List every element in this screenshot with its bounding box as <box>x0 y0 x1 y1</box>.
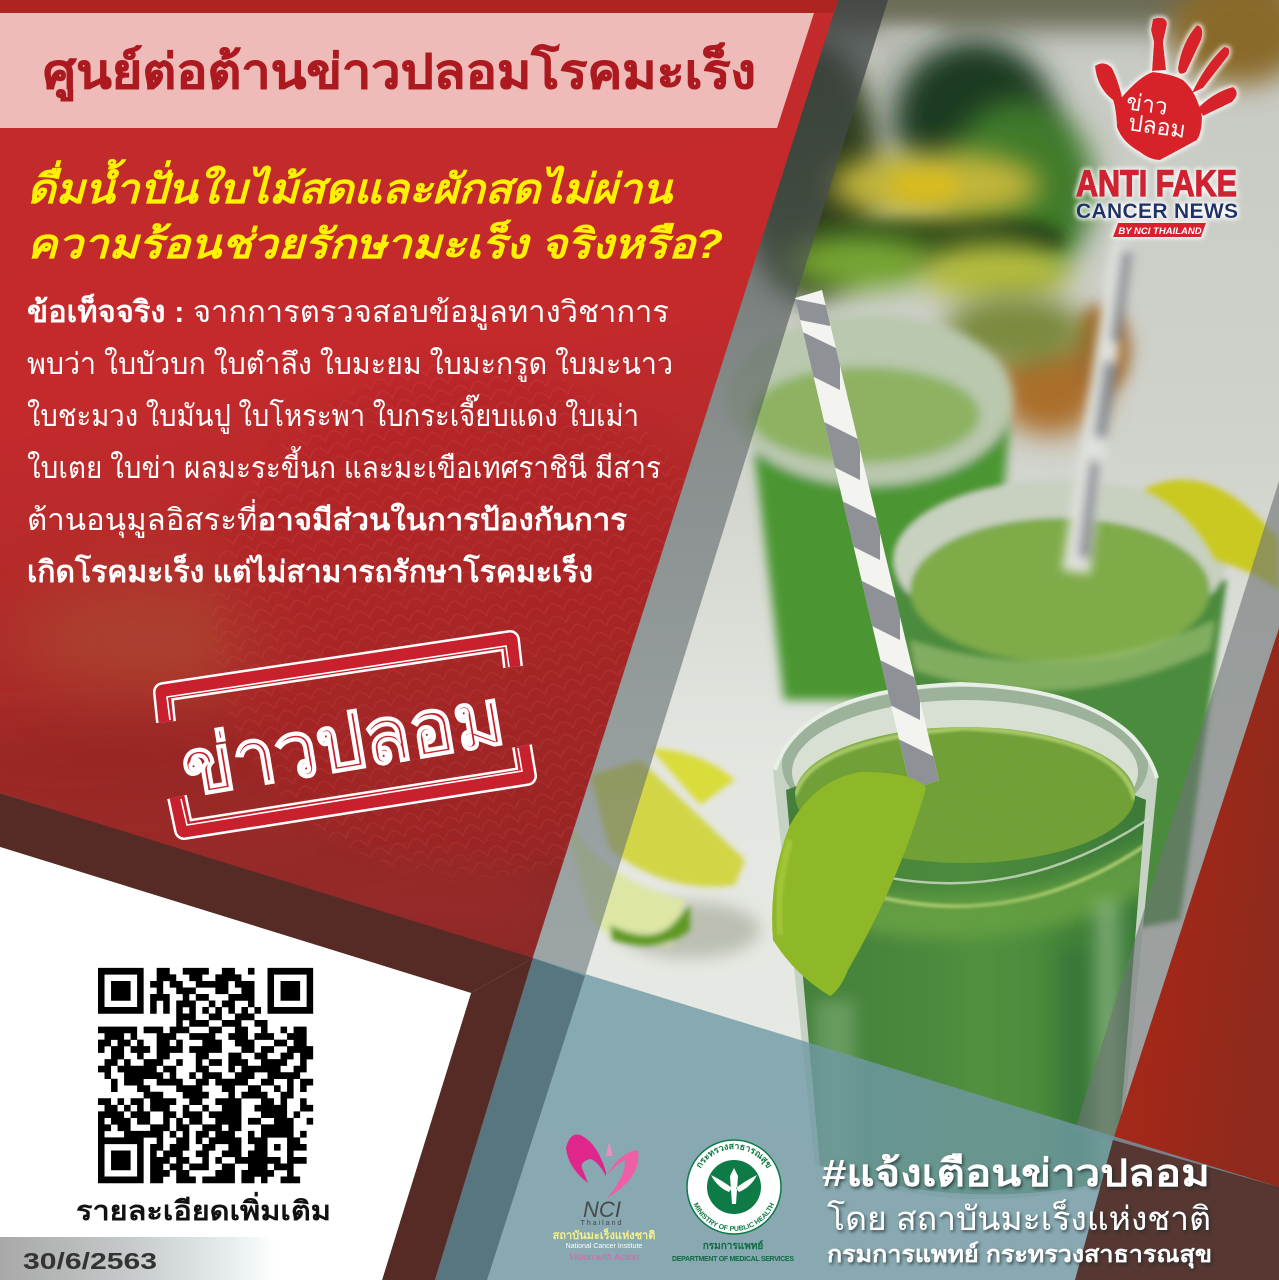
middle glass <box>893 480 1227 931</box>
logo: National Cancer Institute <box>553 1135 655 1262</box>
logo: Anti Fake Cancer News hand <box>1076 18 1238 237</box>
logo: Ministry of Public Health <box>672 1139 794 1263</box>
grey translucent strip beside red panel <box>532 0 888 976</box>
question title <box>27 158 723 267</box>
body text: fact check: ต้านอนุมูลอิสระที่ อาจมีส่วนในการป้องกันการ <box>27 499 627 539</box>
heading: ศูนย์ต่อต้านข่าวปลอมโรคมะเร็ง <box>43 42 756 102</box>
logo: Ministry of Public Health: MINISTRY OF PUBLIC HEALTH <box>694 1202 774 1231</box>
logo: National Cancer Institute: NCI <box>583 1197 621 1222</box>
front glass <box>773 683 1160 1210</box>
logo: Anti Fake Cancer News hand: BY NCI THAILAND <box>1118 226 1202 237</box>
stamp: fake news: ข่าวปลอม <box>175 672 510 813</box>
icon: red hand: ปลอม <box>1127 109 1187 143</box>
logo: National Cancer Institute: สถาบันมะเร็งแห่งชาติ <box>553 1228 655 1242</box>
QR caption: รายละเอียดเพิ่มเติม <box>76 1191 331 1226</box>
blurred kitchen background <box>740 0 1279 435</box>
panel: white QR panel <box>0 847 471 1280</box>
panel: dark bottom right corner <box>1075 1140 1279 1280</box>
panel: dark diagonal beside white panel <box>382 958 533 1280</box>
grey translucent strip at right <box>1075 481 1279 1142</box>
body text: fact check <box>27 293 673 589</box>
panel: darker teal diagonal <box>435 958 585 1280</box>
header banner <box>0 13 814 128</box>
logo: National Cancer Institute: Vision with Action <box>569 1252 639 1262</box>
panel: right red strip <box>1113 628 1279 1190</box>
body text: fact check: ใบเตย ใบข่า ผลมะระขี้นก และมะเขือเทศราชินี มีสาร <box>27 446 661 485</box>
background glass <box>727 314 1013 700</box>
question title: ความร้อนช่วยรักษามะเร็ง จริงหรือ? <box>27 219 723 267</box>
rear straw <box>1062 240 1132 574</box>
logo: Ministry of Public Health: กระทรวงสาธารณสุข <box>697 1143 772 1168</box>
campaign text: โดย สถาบันมะเร็งแห่งชาติ <box>827 1199 1211 1237</box>
date strip <box>0 1237 275 1280</box>
icon: red hand <box>1095 18 1237 160</box>
campaign text: #แจ้งเตือนข่าวปลอม <box>822 1153 1210 1195</box>
logo: Ministry of Public Health: DEPARTMENT OF MEDICAL SERVICES <box>672 1256 794 1263</box>
logo: National Cancer Institute: Thailand <box>581 1220 623 1227</box>
panel: main red panel <box>0 0 838 960</box>
body text: fact check: ใบชะมวง ใบมันปู ใบโหระพา ใบกระเจี๊ยบแดง ใบเม่า <box>27 394 639 434</box>
lime wedges <box>565 748 760 958</box>
question title: ดื่มน้ำปั่นใบไม้สดและผักสดไม่ผ่าน <box>27 158 674 212</box>
rear lime <box>1143 480 1279 590</box>
logo: National Cancer Institute: National Cancer Institute <box>566 1243 642 1250</box>
logo: Anti Fake Cancer News hand: CANCER NEWS <box>1076 200 1238 223</box>
body text: fact check: เกิดโรคมะเร็ง แต่ไม่สามารถรักษาโรคมะเร็ง <box>27 553 593 589</box>
front straw <box>790 290 945 800</box>
QR code <box>98 971 313 1180</box>
campaign text <box>822 1153 1212 1269</box>
body text: fact check: ข้อเท็จจริง : จากการตรวจสอบข้อมูลทางวิชาการ <box>27 293 669 330</box>
date strip: 30/6/2563 <box>23 1248 157 1274</box>
panel: teal bottom band <box>435 958 1279 1280</box>
panel: dark band under red panel <box>0 793 533 993</box>
logo: Anti Fake Cancer News hand: ANTI FAKE <box>1076 163 1237 204</box>
lime wedge on rim <box>772 772 926 996</box>
photo: green smoothie glasses <box>533 0 1279 1199</box>
campaign text: กรมการแพทย์ กระทรวงสาธารณสุข <box>827 1241 1212 1269</box>
body text: fact check: พบว่า ใบบัวบก ใบตำลึง ใบมะยม ใบมะกรูด ใบมะนาว <box>27 347 673 382</box>
logo: Ministry of Public Health: กรมการแพทย์ <box>703 1240 763 1252</box>
icon: red hand: ข่าว <box>1125 88 1170 120</box>
